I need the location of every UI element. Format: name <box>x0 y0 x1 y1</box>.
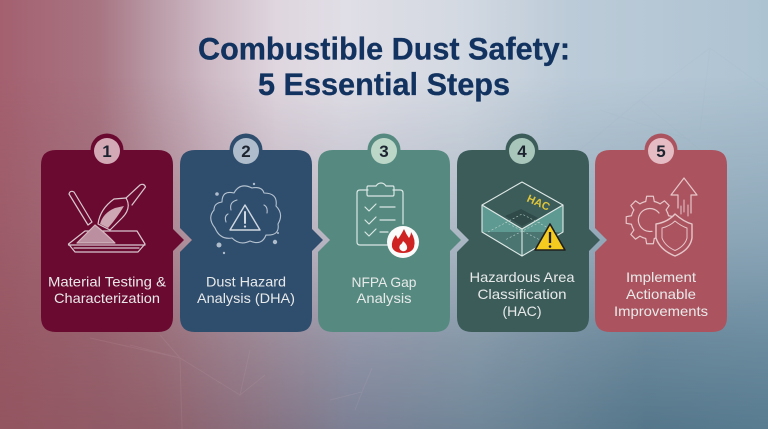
panel: step 5 implement improvements: Improvements <box>614 303 708 319</box>
panel: step 4 hazardous area classification: (HAC) <box>502 303 542 319</box>
shield <box>656 214 692 256</box>
badge 1: 1 <box>102 142 112 161</box>
panel: step 2 dust hazard analysis <box>180 134 323 332</box>
badge 2 <box>230 134 262 166</box>
badge 3: 3 <box>379 142 389 161</box>
badge 5 <box>644 134 678 166</box>
panel: step 1 material testing <box>41 134 184 332</box>
panel: step 3 nfpa gap analysis <box>318 134 461 332</box>
panel: step 4 hazardous area classification: Classification <box>478 286 566 302</box>
card 4 shape <box>457 150 600 332</box>
icon: hazardous area box <box>482 182 565 256</box>
panel: step 1 material testing: Characterization <box>54 290 160 306</box>
label 1: Material Testing & <box>48 274 167 290</box>
card 3 shape <box>318 150 461 332</box>
badge 5: 5 <box>656 142 666 161</box>
label 4: Hazardous Area <box>470 269 575 285</box>
label 3: NFPA Gap <box>352 274 417 290</box>
card 5 shape <box>595 150 727 332</box>
title <box>198 30 570 102</box>
badge 4 <box>506 134 538 166</box>
panel: step 5 implement improvements: Actionable <box>626 286 696 302</box>
icon: checklist with flame <box>357 183 419 258</box>
card 2 shape <box>180 150 323 332</box>
panel: step 2 dust hazard analysis: Analysis (DHA) <box>197 290 295 306</box>
arrow <box>671 178 697 213</box>
badge 3 <box>368 134 400 166</box>
title: 5 Essential Steps <box>258 66 510 102</box>
badge 2: 2 <box>241 142 251 161</box>
label 2: Dust Hazard <box>206 274 286 290</box>
icon: dust cloud with warning <box>211 183 281 254</box>
panel: step 4 hazardous area classification <box>457 134 600 332</box>
panel: step 3 nfpa gap analysis: Analysis <box>356 290 412 306</box>
label 5: Implement <box>626 269 696 285</box>
gear <box>626 196 674 244</box>
badge 1 <box>90 134 124 166</box>
icon: scoop, spatula and tray <box>68 184 146 252</box>
title: Combustible Dust Safety: <box>198 30 570 66</box>
panel: step 5 implement improvements <box>595 134 727 332</box>
badge 4: 4 <box>517 142 527 161</box>
card 1 shape <box>41 150 184 332</box>
icon: hazardous area box: HAC <box>525 193 552 214</box>
icon: gear, shield and arrow <box>626 178 697 256</box>
